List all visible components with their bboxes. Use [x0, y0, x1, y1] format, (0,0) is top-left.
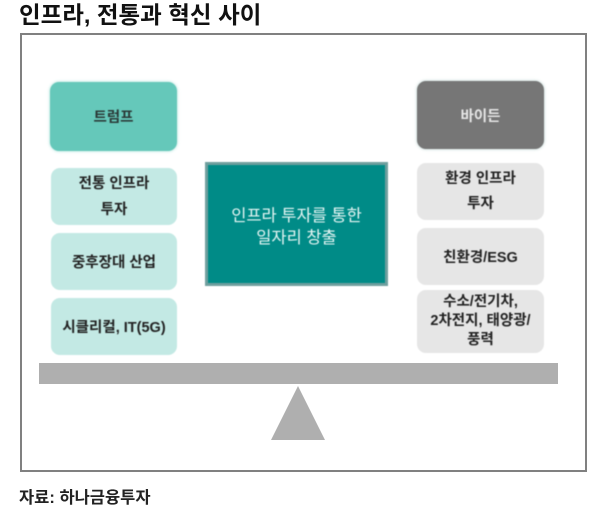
source note: 자료: 하나금융투자: [19, 489, 151, 507]
title: 인프라, 전통과 혁신 사이: [19, 2, 261, 28]
panel: central message: [205, 162, 388, 286]
Trump item: heavy industry: [51, 233, 177, 290]
Biden item: ESG: 친환경/ESG: [443, 250, 518, 266]
Trump item: cyclical and IT: 시클리컬, IT(5G): [62, 320, 166, 336]
panel: Trump heading: 트럼프: [93, 110, 134, 126]
Biden item: hydrogen and renewables: 풍력: [467, 332, 494, 348]
Trump item: traditional infrastructure: [51, 168, 177, 225]
Biden item: hydrogen and renewables: 2차전지, 태양광/: [430, 313, 531, 329]
balance fulcrum: [271, 386, 325, 440]
Biden item: green infrastructure: 환경 인프라: [445, 171, 516, 187]
Trump item: traditional infrastructure: 전통 인프라: [79, 176, 149, 192]
Biden item: ESG: [417, 228, 544, 285]
panel: central message: 인프라 투자를 통한: [231, 206, 362, 224]
panel: central message: 일자리 창출: [256, 228, 337, 246]
Trump item: traditional infrastructure: 투자: [101, 202, 127, 218]
panel: Biden heading: [417, 81, 544, 149]
Biden item: hydrogen and renewables: 수소/전기차,: [443, 294, 518, 310]
panel: Biden heading: 바이든: [460, 108, 501, 124]
Biden item: hydrogen and renewables: [417, 290, 544, 353]
Trump item: cyclical and IT: [51, 298, 177, 355]
Trump item: heavy industry: 중후장대 산업: [72, 255, 156, 271]
balance beam: [39, 363, 558, 384]
Biden item: green infrastructure: [417, 163, 544, 220]
Biden item: green infrastructure: 투자: [467, 196, 494, 212]
panel: Trump heading: [50, 82, 177, 151]
